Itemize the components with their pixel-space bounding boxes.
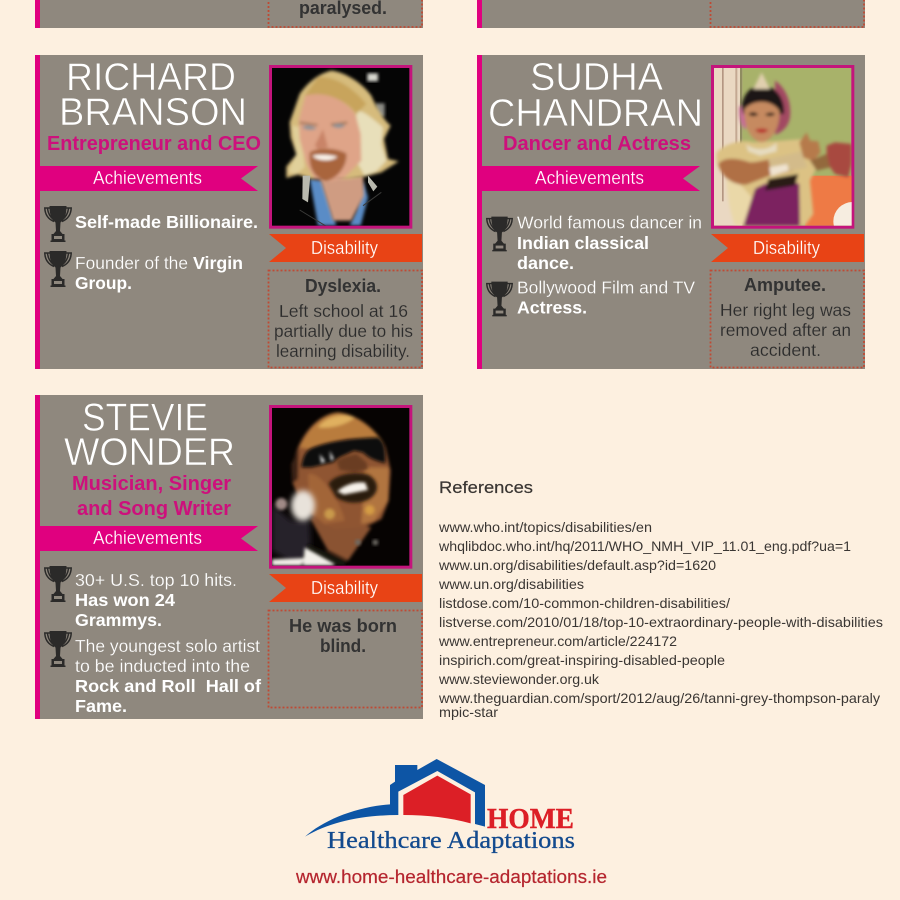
disability box: Her right leg was — [720, 300, 851, 320]
website url: www.home-healthcare-adaptations.ie — [295, 867, 607, 887]
heading: Stevie Wonder — [64, 396, 235, 474]
achievement text: Rock and Roll Hall of — [75, 676, 261, 696]
references list — [438, 519, 883, 720]
photo: Stevie Wonder — [270, 406, 411, 567]
banner: disability: Disability — [311, 578, 378, 598]
achievement text — [75, 570, 237, 630]
references list: listdose.com/10-common-children-disabilities/ — [439, 595, 730, 611]
banner: disability — [711, 234, 864, 262]
banner: disability — [269, 234, 422, 262]
achievement text — [517, 212, 702, 273]
achievement text: Indian classical — [517, 233, 649, 253]
achievement text: Has won 24 — [75, 590, 175, 610]
photo: Richard Branson — [270, 66, 411, 227]
achievement text: to be inducted into the — [75, 656, 250, 676]
heading: Richard Branson: BRANSON — [59, 91, 247, 134]
references list: www.steviewonder.org.uk — [438, 671, 600, 687]
references list: whqlibdoc.who.int/hq/2011/WHO_NMH_VIP_11.01_eng.pdf?ua=1 — [438, 538, 851, 554]
disability box — [268, 270, 422, 368]
references list: inspirich.com/great-inspiring-disabled-people — [439, 652, 725, 668]
disability box: partially due to his — [274, 321, 413, 341]
references — [438, 478, 883, 720]
disability box: Dyslexia. — [305, 276, 381, 296]
panel: top left card remnant — [35, 0, 423, 28]
achievement text: Fame. — [75, 696, 127, 716]
achievement text: Bollywood Film and TV — [517, 278, 695, 298]
achievement text — [75, 636, 261, 716]
achievement text: World famous dancer in — [517, 212, 702, 232]
references list: www.un.org/disabilities — [438, 576, 584, 592]
logo house mark — [305, 759, 485, 837]
achievement text: The youngest solo artist — [75, 636, 260, 656]
disability box: learning disability. — [276, 341, 410, 361]
icon: trophy — [45, 206, 71, 242]
panel: top right card remnant — [477, 0, 865, 28]
logo: Home Healthcare Adaptations — [305, 759, 575, 854]
banner: achievements — [40, 166, 258, 191]
references list: mpic-star — [439, 704, 498, 720]
disability box: blind. — [320, 636, 366, 656]
role: and Song Writer — [77, 498, 231, 520]
icon: trophy — [487, 217, 512, 251]
references list: www.who.int/topics/disabilities/en — [438, 519, 652, 535]
heading: Richard Branson: RICHARD — [66, 56, 236, 99]
achievement text: 30+ U.S. top 10 hits. — [75, 570, 237, 590]
photo: Sudha Chandran — [711, 65, 854, 229]
panel: Stevie Wonder — [35, 395, 423, 719]
role: Entrepreneur and CEO — [47, 133, 261, 155]
icon: trophy — [45, 631, 71, 667]
disability box — [710, 270, 864, 368]
disability box: removed after an — [720, 320, 851, 340]
references list: www.un.org/disabilities/default.asp?id=1620 — [438, 557, 716, 573]
heading: Stevie Wonder: WONDER — [64, 431, 235, 474]
icon: trophy — [487, 282, 512, 316]
heading: Sudha Chandran: CHANDRAN — [488, 92, 703, 135]
achievement text: Actress. — [517, 298, 587, 318]
references list: listverse.com/2010/01/18/top-10-extraordinary-people-with-disabilities — [439, 614, 883, 630]
achievement text — [75, 253, 243, 293]
role — [72, 473, 231, 520]
achievement text: Virgin — [193, 253, 243, 273]
role: Musician, Singer — [72, 473, 231, 495]
panel: Richard Branson — [35, 55, 423, 369]
heading: Sudha Chandran: SUDHA — [530, 56, 663, 99]
references heading: References — [439, 478, 533, 497]
icon: trophy — [45, 251, 71, 287]
banner: achievements: Achievements — [535, 168, 644, 188]
achievement text: dance. — [517, 253, 574, 273]
role: Dancer and Actress — [503, 133, 691, 155]
banner: achievements: Achievements — [93, 168, 202, 188]
achievement text: Founder of the — [75, 253, 188, 273]
banner: disability: Disability — [753, 238, 820, 258]
references list: www.theguardian.com/sport/2012/aug/26/tanni-grey-thompson-paraly — [438, 690, 880, 706]
disability box: Amputee. — [744, 275, 826, 295]
banner: achievements — [40, 526, 258, 551]
disability box: He was born — [289, 616, 397, 636]
panel: Sudha Chandran — [477, 55, 872, 369]
disability box: accident. — [750, 340, 821, 360]
heading: Stevie Wonder: STEVIE — [82, 396, 208, 440]
achievement text: Group. — [75, 273, 132, 293]
disability box: Left school at 16 — [279, 301, 408, 321]
banner: achievements: Achievements — [93, 528, 202, 548]
heading: Richard Branson — [59, 56, 247, 134]
logo word: HOME: HOME — [487, 804, 574, 835]
banner: disability — [269, 574, 422, 602]
heading: Sudha Chandran — [488, 56, 703, 135]
icon: trophy — [45, 566, 71, 602]
disability box — [268, 610, 422, 708]
achievement text — [517, 278, 695, 318]
banner: achievements — [482, 166, 700, 191]
references list: www.entrepreneur.com/article/224172 — [438, 633, 677, 649]
banner: disability: Disability — [311, 238, 378, 258]
logo words: Healthcare Adaptations: Healthcare Adaptations — [327, 828, 575, 854]
achievement text: Self-made Billionaire. — [75, 212, 258, 232]
achievement text: Grammys. — [75, 610, 162, 630]
